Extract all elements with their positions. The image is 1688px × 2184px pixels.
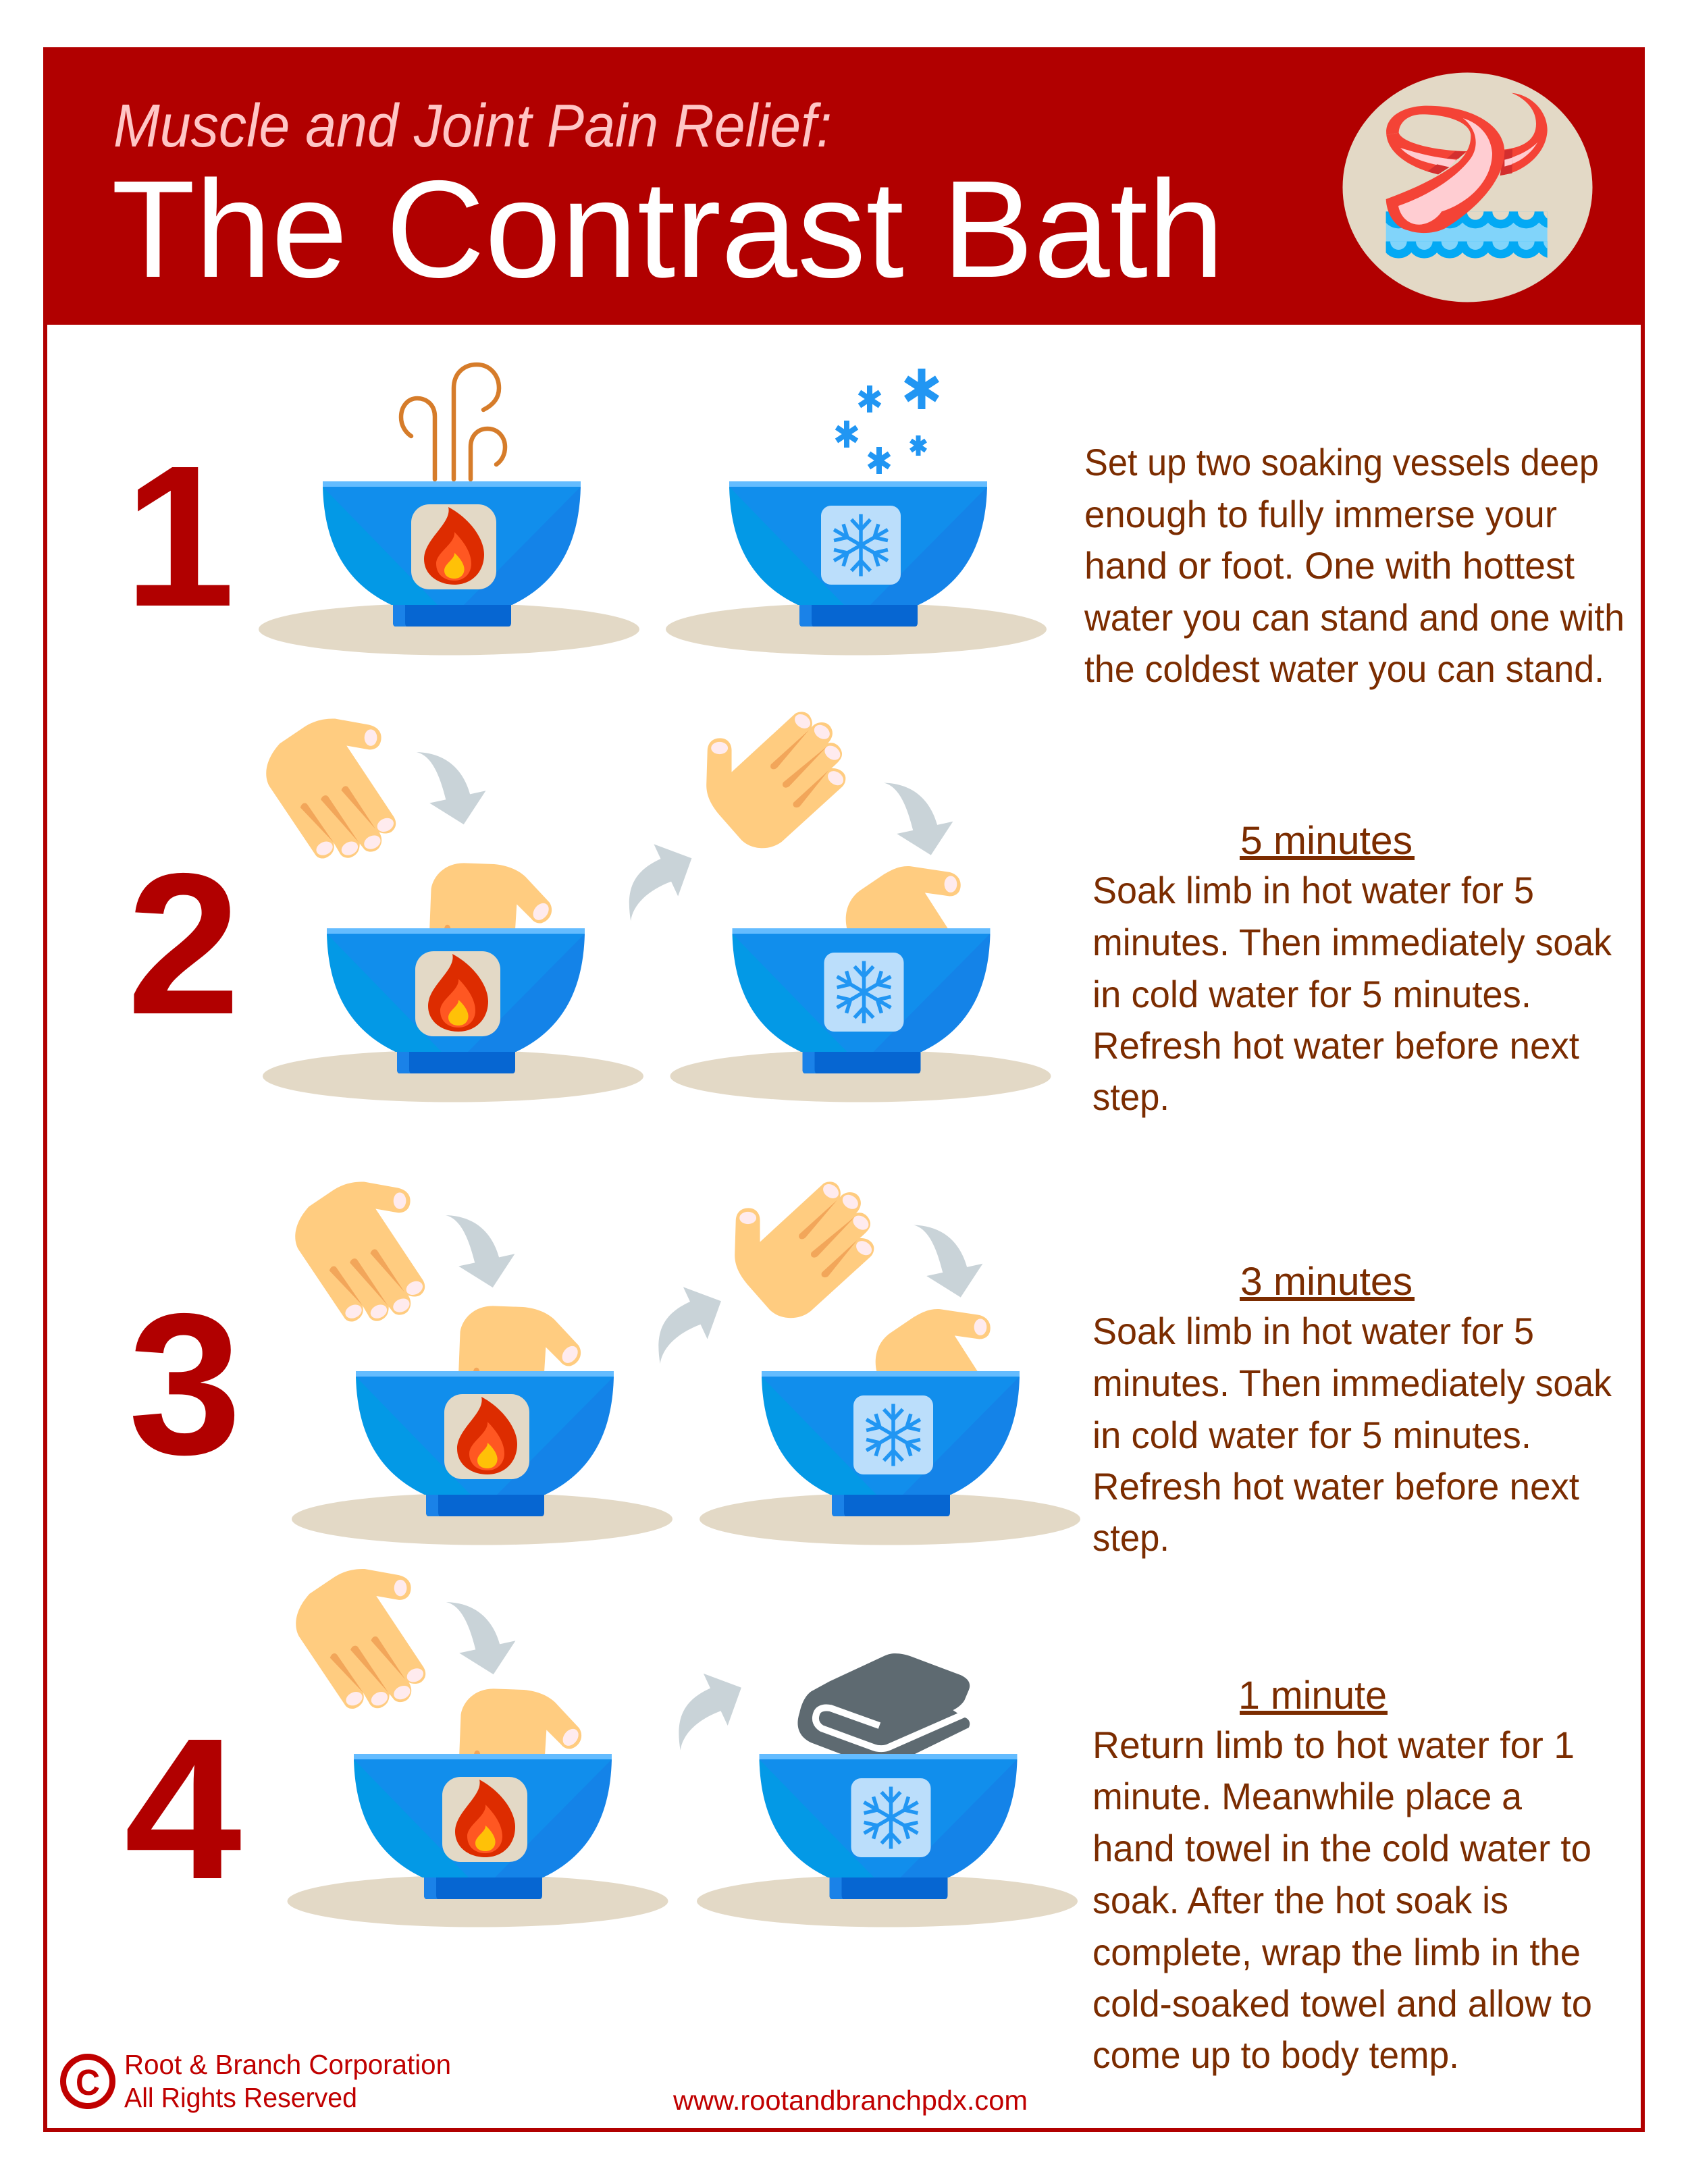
step 3 instructions: Soak limb in hot water for 5: [1092, 1310, 1534, 1352]
step 4 instructions: hand towel in the cold water to: [1092, 1827, 1591, 1869]
copyright text: Root & Branch Corporation: [124, 2049, 451, 2080]
cold bowl with snowflakes: [666, 369, 1047, 655]
step 1 instructions: hand or foot. One with hottest: [1084, 544, 1575, 587]
step 4 instructions: soak. After the hot soak is: [1092, 1879, 1508, 1921]
hand entering hot bowl: [288, 1569, 668, 1927]
step 2 instructions: step.: [1092, 1075, 1169, 1118]
header banner: [43, 47, 1645, 325]
step 2 instructions: Refresh hot water before next: [1092, 1024, 1579, 1067]
step 1 instructions: water you can stand and one with: [1084, 596, 1625, 639]
step 3 instructions: in cold water for 5 minutes.: [1092, 1414, 1531, 1456]
number 1: 1: [124, 424, 235, 649]
step 2 instructions: [1092, 819, 1612, 1118]
towel in cold bowl: [697, 1653, 1078, 1927]
step 4: [124, 1569, 1592, 2076]
icon: snowflakes: [837, 369, 937, 474]
hot bowl with steam: [259, 365, 639, 655]
step 1 instructions: Set up two soaking vessels deep: [1084, 441, 1599, 483]
icon: copyright: [63, 2056, 112, 2106]
step 2 instructions: in cold water for 5 minutes.: [1092, 973, 1531, 1015]
step 4 instructions: complete, wrap the limb in the: [1092, 1931, 1581, 1973]
hand entering hot bowl: [263, 718, 643, 1102]
hand entering cold bowl: [670, 712, 1051, 1102]
number 3: 3: [128, 1272, 242, 1497]
step 1 instructions: [1084, 441, 1625, 690]
step 3: [128, 1181, 1612, 1559]
title: The Contrast Bath: [111, 152, 1224, 307]
number 4: 4: [124, 1697, 243, 1921]
step 4 instructions: 1 minute: [1238, 1674, 1387, 1717]
step 4 instructions: Return limb to hot water for 1: [1092, 1724, 1575, 1766]
step 3 instructions: Refresh hot water before next: [1092, 1465, 1579, 1508]
arrow: hot to cold: [629, 844, 691, 921]
step 1 instructions: the coldest water you can stand.: [1084, 647, 1604, 690]
arrow: hot to towel: [679, 1674, 741, 1751]
step 2 instructions: 5 minutes: [1240, 819, 1413, 863]
copyright text: All Rights Reserved: [124, 2082, 357, 2113]
footer: [63, 2049, 1028, 2116]
icon: copyright: C: [76, 2062, 100, 2103]
step 1 instructions: enough to fully immerse your: [1084, 493, 1557, 535]
step 1: [124, 365, 1625, 690]
step 3 instructions: minutes. Then immediately soak: [1092, 1362, 1612, 1404]
icon: steam: [401, 365, 505, 479]
step 4 instructions: [1092, 1674, 1592, 2076]
step 2 instructions: Soak limb in hot water for 5: [1092, 869, 1534, 911]
number 2: 2: [127, 832, 240, 1057]
hand entering cold bowl: [700, 1181, 1080, 1545]
step 3 instructions: [1092, 1260, 1612, 1559]
copyright text: [124, 2049, 451, 2113]
website: www.rootandbranchpdx.com: [672, 2085, 1028, 2116]
hand entering hot bowl: [292, 1181, 672, 1545]
arrow: hot to cold: [658, 1287, 721, 1364]
step 3 instructions: step.: [1092, 1516, 1169, 1559]
step 4 instructions: come up to body temp.: [1092, 2033, 1459, 2076]
step 4 instructions: cold-soaked towel and allow to: [1092, 1982, 1592, 2025]
step 2: [127, 712, 1612, 1118]
icon: folded towel: [797, 1653, 970, 1755]
badge: ribbon over water: [1342, 73, 1592, 302]
step 2 instructions: minutes. Then immediately soak: [1092, 921, 1612, 963]
step 4 instructions: minute. Meanwhile place a: [1092, 1775, 1523, 1817]
subtitle: Muscle and Joint Pain Relief:: [113, 92, 832, 160]
step 3 instructions: 3 minutes: [1240, 1260, 1413, 1304]
